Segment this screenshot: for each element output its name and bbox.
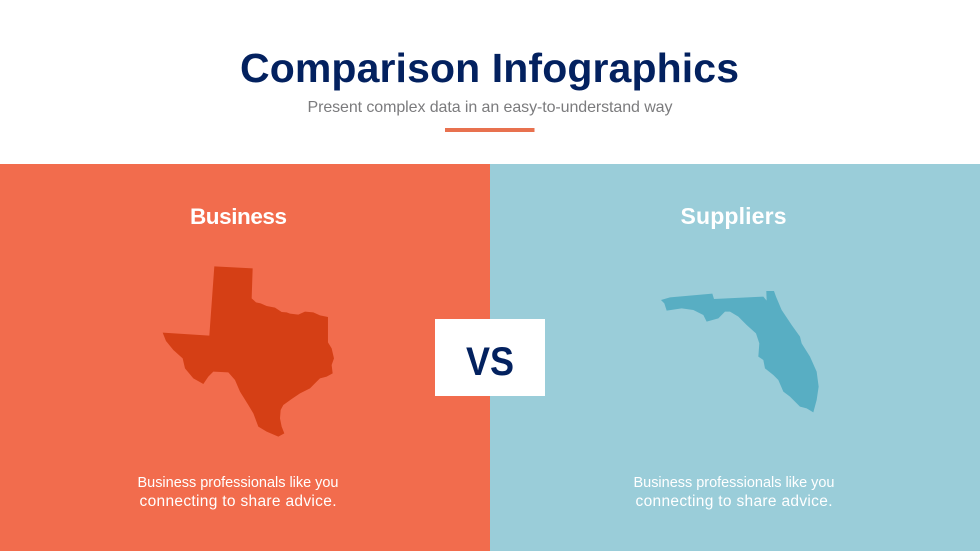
body text: suppliers: Business professionals like you (634, 475, 834, 491)
icon: Texas map (163, 266, 334, 437)
vs badge (435, 319, 545, 396)
body text: business: Business professionals like you (138, 475, 338, 491)
vs label: VS (466, 340, 514, 384)
title: Comparison Infographics (240, 45, 739, 91)
body text: suppliers: connecting to share advice. (636, 493, 832, 510)
body text: business: connecting to share advice. (140, 493, 336, 510)
icon: Florida map (661, 291, 819, 412)
title underline (445, 128, 534, 132)
body text: business (138, 475, 338, 510)
panel: business (0, 164, 490, 551)
heading: suppliers: Suppliers (680, 203, 786, 229)
panel: suppliers (490, 164, 980, 551)
subtitle: Present complex data in an easy-to-understand way (308, 99, 672, 116)
heading: business: Business (190, 204, 287, 229)
body text: suppliers (634, 475, 834, 510)
